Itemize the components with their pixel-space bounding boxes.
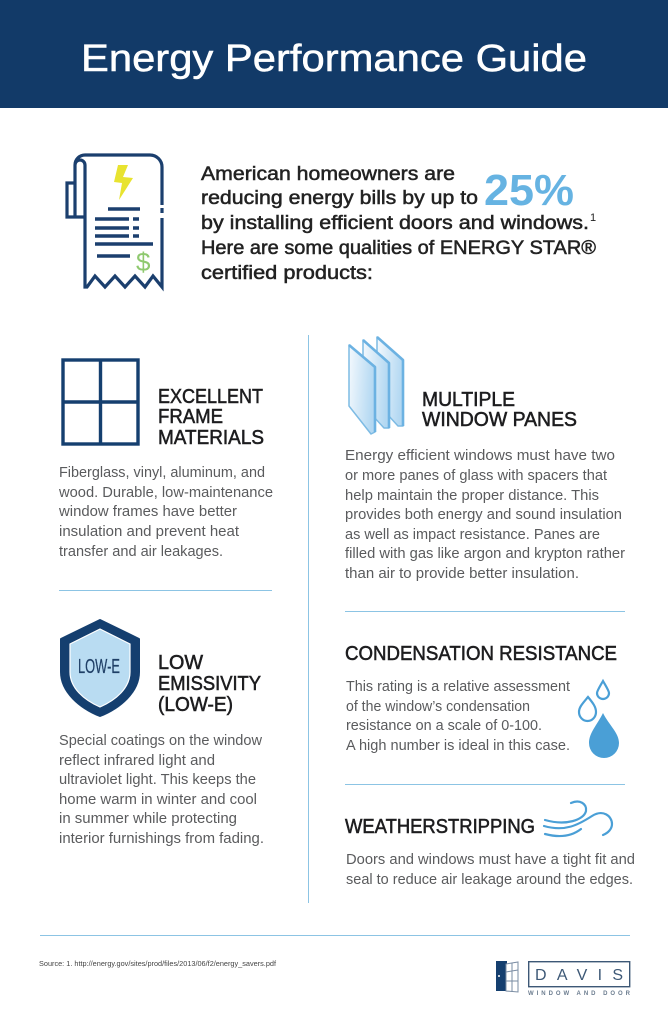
body: frame materials: Fiberglass, vinyl, aluminum, and (59, 465, 265, 481)
heading: low emissivity: EMISSIVITY (158, 673, 261, 695)
intro text: 1 (590, 212, 596, 224)
icon: window frame (63, 360, 138, 444)
body: low emissivity: interior furnishings from fading. (59, 831, 264, 847)
panel: weatherstripping (345, 802, 635, 888)
icon: wind (544, 802, 612, 836)
heading: multiple window panes: WINDOW PANES (422, 409, 577, 431)
logo: Davis Window and Door: WINDOW AND DOOR (528, 991, 631, 997)
intro text: certified products: (201, 263, 373, 284)
heading: low emissivity: (LOW-E) (158, 694, 233, 716)
heading: weatherstripping: WEATHERSTRIPPING (345, 816, 535, 838)
body: multiple window panes: provides both energy and sound insulation (345, 507, 622, 523)
intro text: reducing energy bills by up to (201, 188, 478, 209)
logo: Davis Window and Door: DAVIS (535, 967, 623, 984)
body: multiple window panes: help maintain the proper distance. This (345, 488, 599, 504)
body: condensation resistance (346, 679, 570, 754)
body: low emissivity: Special coatings on the window (59, 733, 263, 749)
body: multiple window panes: as well as impact resistance. Panes are (345, 527, 600, 543)
body: multiple window panes: filled with gas like argon and krypton rather (345, 546, 625, 562)
body: low emissivity: in summer while protecting (59, 811, 237, 827)
heading: frame materials (158, 386, 264, 449)
body: condensation resistance: of the window’s condensation (346, 699, 530, 715)
body: frame materials: transfer and air leakages. (59, 544, 223, 560)
body: multiple window panes: or more panes of glass with spacers that (345, 468, 607, 484)
icon: low-e shield: LOW-E (78, 656, 120, 678)
logo: Davis Window and Door (496, 961, 631, 997)
icon: glass panes (349, 337, 403, 434)
body: multiple window panes: Energy efficient windows must have two (345, 448, 615, 464)
body: weatherstripping (346, 852, 635, 888)
body: low emissivity: home warm in winter and cool (59, 792, 257, 808)
25% statistic: 25% (484, 166, 574, 215)
intro text (201, 164, 596, 284)
icon: water drops (579, 681, 619, 758)
body: multiple window panes (345, 448, 625, 582)
intro text: Here are some qualities of ENERGY STAR® (201, 238, 596, 259)
body: frame materials: wood. Durable, low-maintenance (58, 485, 273, 501)
source note: Source: 1. http://energy.gov/sites/prod/files/2013/06/f2/energy_savers.pdf (39, 959, 277, 968)
body: multiple window panes: than air to provide better insulation. (345, 566, 579, 582)
panel: low emissivity (59, 620, 264, 847)
body: condensation resistance: A high number is ideal in this case. (346, 738, 570, 754)
body: weatherstripping: Doors and windows must have a tight fit and (346, 852, 635, 868)
body: condensation resistance: resistance on a scale of 0-100. (346, 718, 542, 734)
body: frame materials: window frames have better (58, 504, 237, 520)
body: condensation resistance: This rating is a relative assessment (346, 679, 570, 695)
center divider (308, 335, 310, 903)
body: low emissivity (59, 733, 264, 847)
icon: energy bill receipt (67, 155, 162, 287)
panel: multiple window panes (345, 337, 625, 582)
heading: condensation resistance: CONDENSATION RESISTANCE (345, 643, 617, 665)
heading: low emissivity: LOW (158, 652, 203, 674)
body: frame materials (58, 465, 273, 560)
heading: multiple window panes: MULTIPLE (422, 389, 515, 411)
title banner (0, 0, 668, 108)
heading: frame materials: EXCELLENT (158, 386, 263, 408)
panel: frame materials (58, 360, 273, 560)
title banner: Energy Performance Guide (81, 38, 587, 80)
heading: multiple window panes (422, 389, 577, 431)
intro text: by installing efficient doors and windows. (201, 213, 589, 234)
body: low emissivity: reflect infrared light and (59, 753, 215, 769)
body: low emissivity: ultraviolet light. This keeps the (59, 772, 256, 788)
body: frame materials: insulation and prevent heat (59, 524, 239, 540)
body: weatherstripping: seal to reduce air leakage around the edges. (346, 872, 633, 888)
icon: open door (496, 961, 518, 992)
panel: condensation resistance (345, 643, 619, 758)
intro text: American homeowners are (201, 164, 455, 185)
heading: frame materials: FRAME (158, 406, 223, 428)
icon: low-e shield (61, 620, 139, 716)
heading: low emissivity (158, 652, 261, 716)
heading: frame materials: MATERIALS (158, 427, 264, 449)
icon: energy bill receipt: $ (136, 247, 151, 277)
